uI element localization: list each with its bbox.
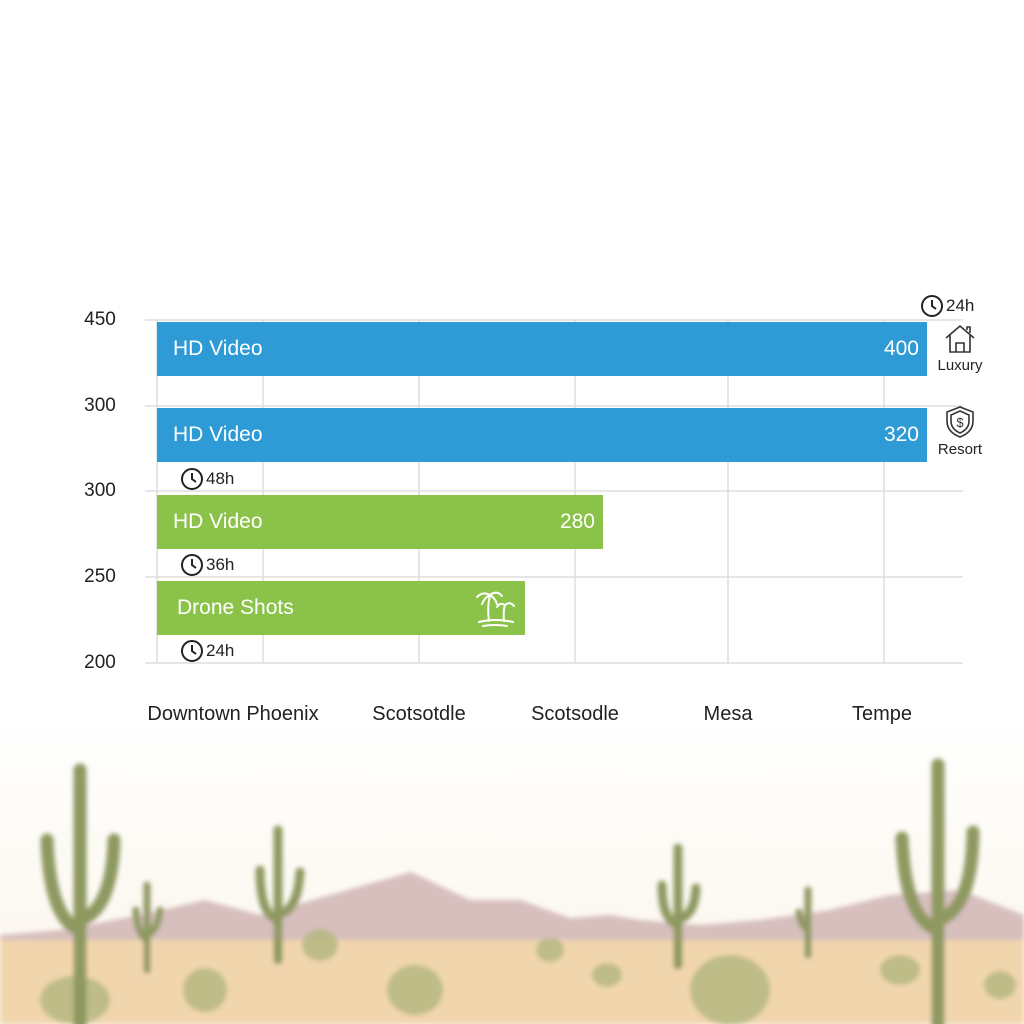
bar: HD Video 280: 280 [560,510,595,533]
icon: Luxury house: Luxury [937,357,983,374]
icon: Resort shield [938,406,982,458]
y axis labels: 300 [84,395,116,416]
bar: HD Video 400: HD Video [173,337,262,360]
y axis labels: 450 [84,309,116,330]
bar: HD Video 280 [157,495,603,549]
x axis labels: Tempe [852,703,912,725]
bar: HD Video 320: 320 [884,423,919,446]
x axis labels: Scotsotdle [372,703,466,725]
icon: Resort shield: $ [956,415,964,430]
bar: HD Video 400: 400 [884,337,919,360]
text: 24h [206,641,234,660]
bar: Drone Shots: Drone Shots [177,596,294,619]
x axis labels [147,703,912,725]
icon: Resort shield: Resort [938,441,982,458]
x axis labels: Scotsodle [531,703,619,725]
x axis labels: Mesa [704,703,752,725]
bar: Drone Shots [157,581,525,635]
icon: palm trees [476,592,515,627]
bar: HD Video 320 [157,408,927,462]
text: 48h [206,469,234,488]
bar: HD Video 320: HD Video [173,423,262,446]
bar: HD Video 400 [157,322,927,376]
y axis labels: 250 [84,566,116,587]
y axis labels [84,309,116,673]
time labels [921,295,974,317]
y axis labels: 200 [84,652,116,673]
bar: HD Video 280: HD Video [173,510,262,533]
time labels: 24h [946,296,974,315]
icon: Luxury house [937,325,983,374]
y axis labels: 300 [84,480,116,501]
x axis labels: Downtown Phoenix [147,703,319,725]
text: 36h [206,555,234,574]
